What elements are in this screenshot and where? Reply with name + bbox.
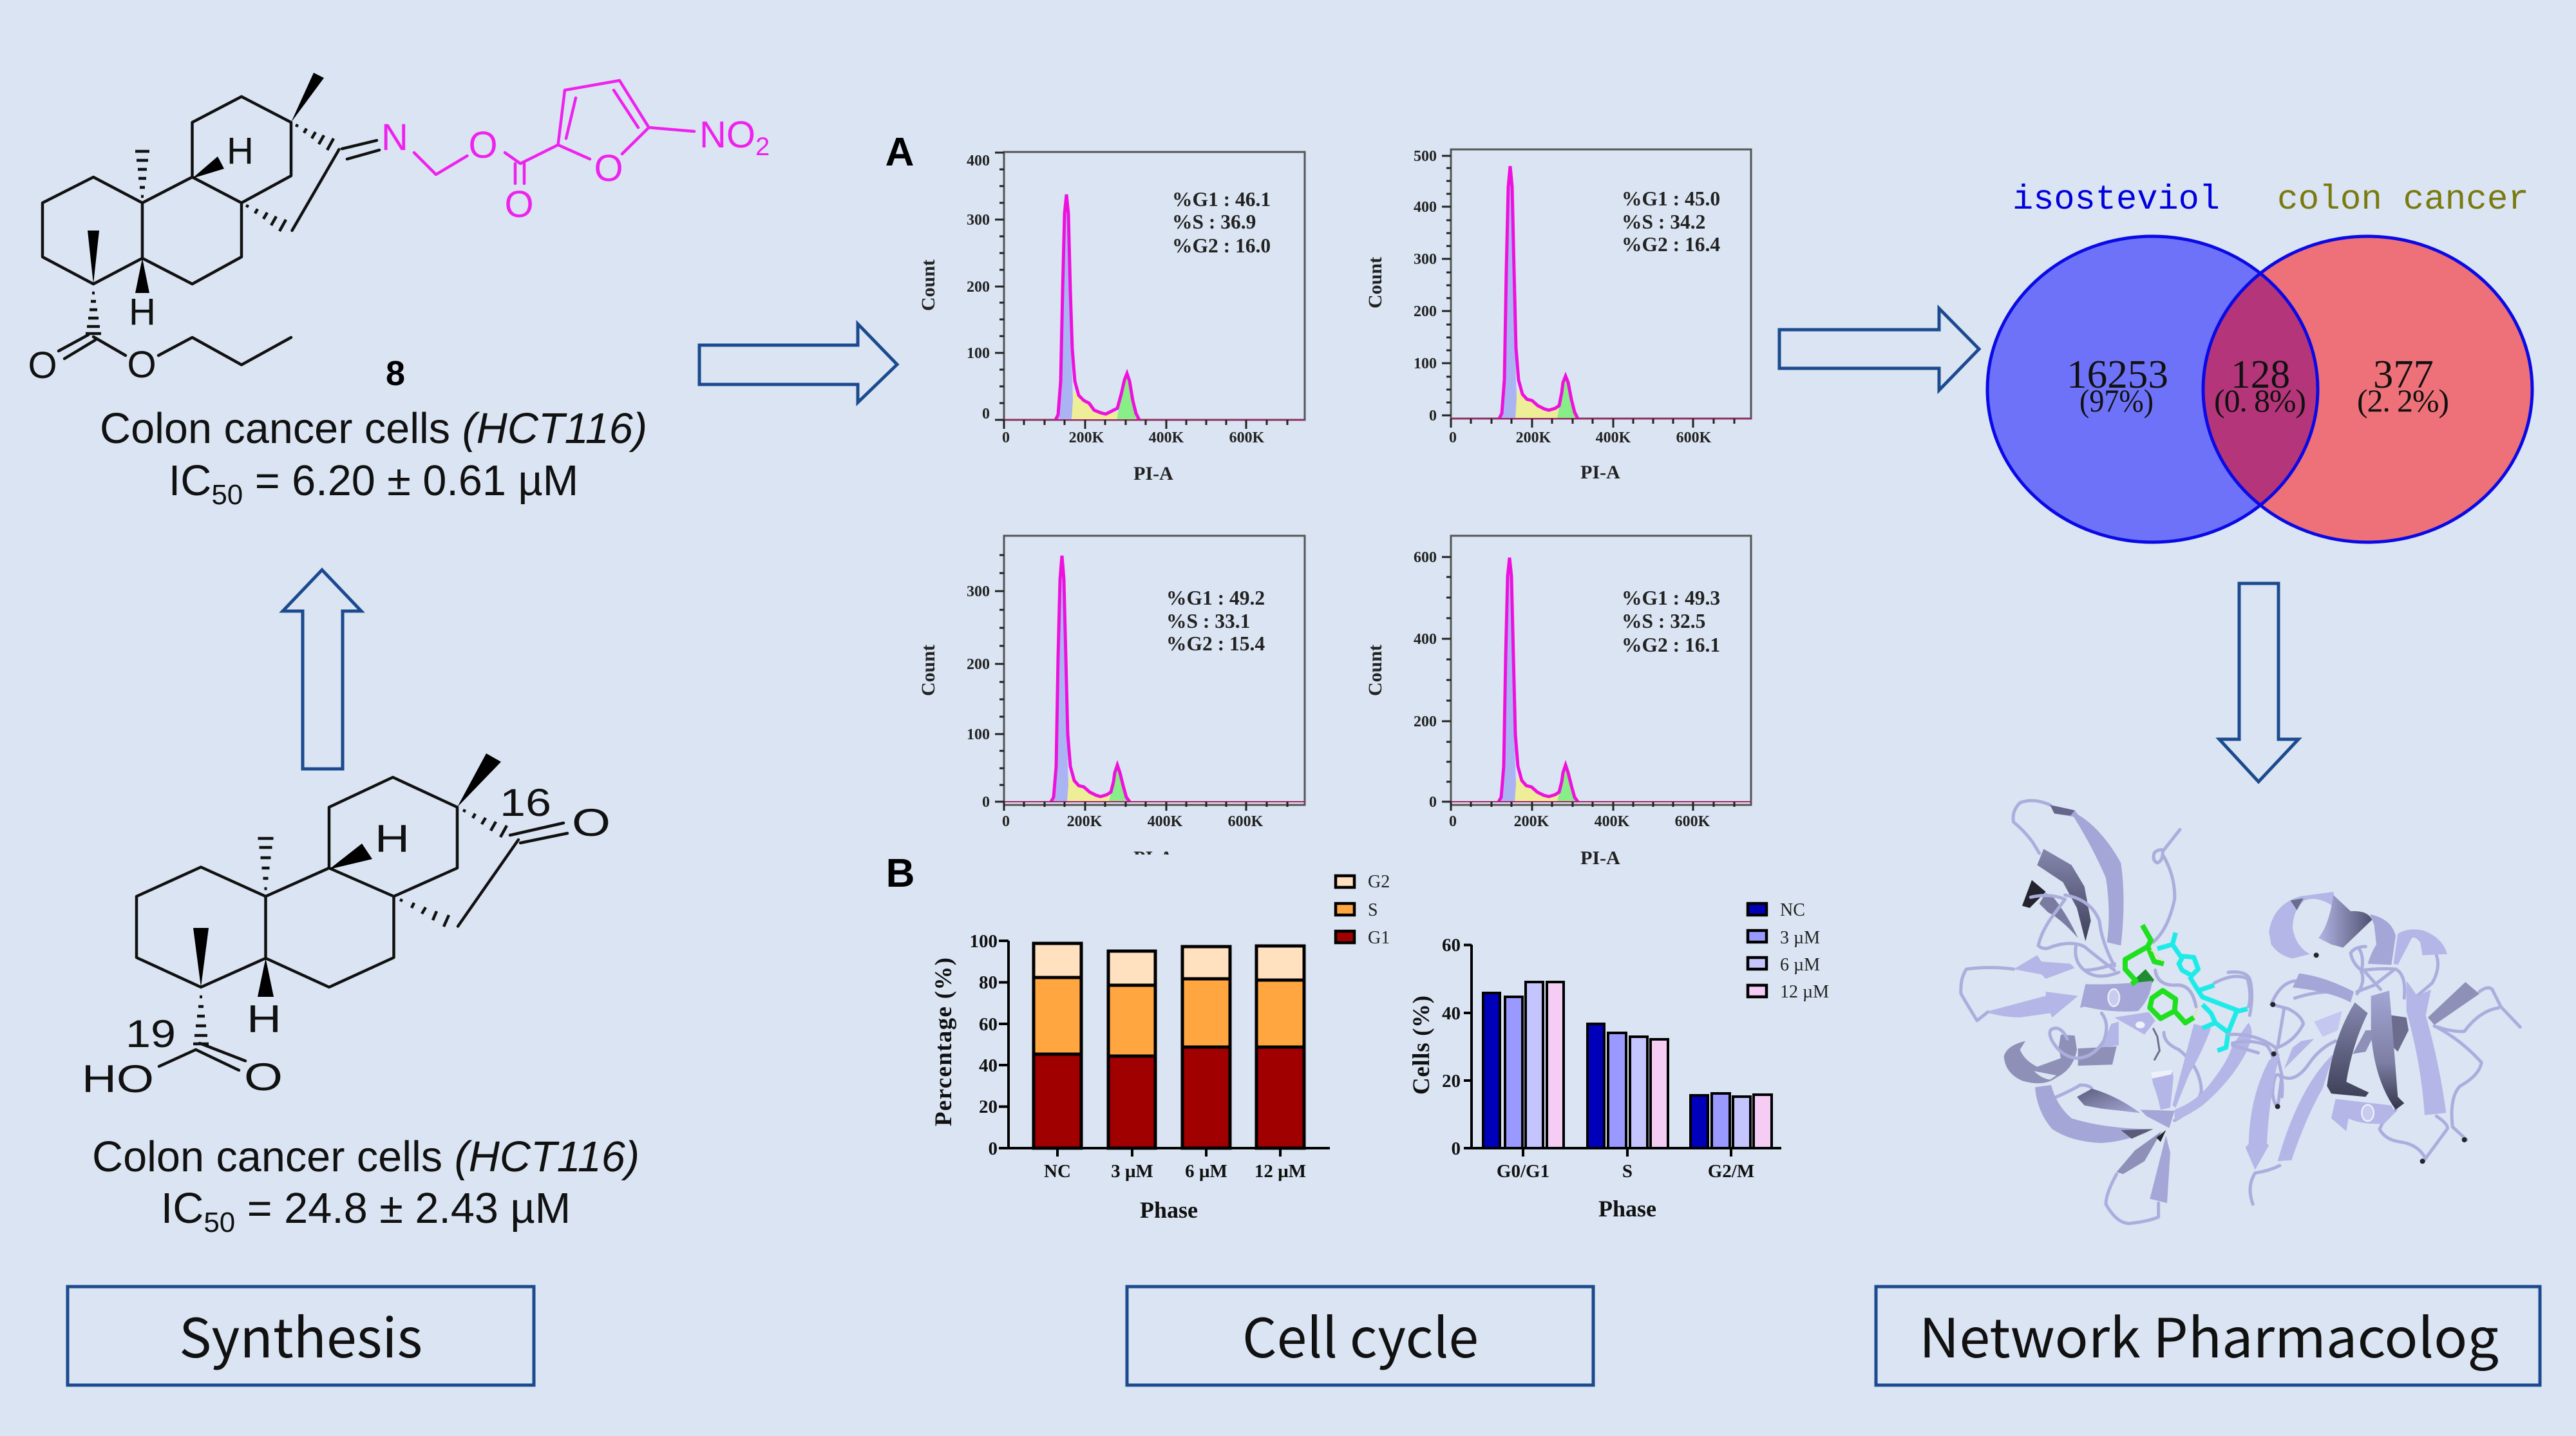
histogram: 6 µM: 600K — [1228, 813, 1264, 830]
activity text: compound 8: = 6.20 ± 0.61 µM — [243, 457, 578, 505]
grouped bar chart: cells per phase: G2/M — [1708, 1161, 1754, 1182]
histogram: 12 µM — [1365, 536, 1751, 869]
histogram: 6 µM: 0 — [982, 794, 990, 811]
compound number: 8 — [386, 354, 405, 393]
histogram: 6 µM: %G2 : 15.4 — [1166, 632, 1265, 655]
panel letter B: B — [886, 851, 914, 896]
bars: G0/G1 — [1483, 982, 1564, 1148]
histogram: NC: 0 — [1002, 430, 1010, 446]
histogram: 6 µM: 200K — [1067, 813, 1103, 830]
label box: cell cycle — [1127, 1287, 1593, 1385]
legend: stacked chart: G2 — [1368, 872, 1390, 892]
histogram: 3 µM: 300 — [1414, 251, 1437, 268]
nitrofuran side chain — [381, 80, 770, 225]
grouped bar chart: cells per phase: 20 — [1442, 1071, 1461, 1091]
label box: synthesis: Synthesis — [179, 1296, 422, 1374]
stacked bar chart: cell phase percentage: Percentage (%) — [931, 958, 957, 1126]
histogram: 12 µM: 400K — [1595, 813, 1630, 830]
nitrofuran side chain: O — [468, 124, 498, 166]
molecule: isosteviol: O — [572, 801, 611, 844]
ligand: green residues — [2125, 925, 2194, 1023]
histogram: NC: PI-A — [1133, 463, 1173, 484]
legend: grouped chart: NC — [1780, 900, 1805, 920]
molecule: isosteviol: 19 — [126, 1012, 176, 1055]
stacked bar chart: cell phase percentage: 40 — [979, 1055, 998, 1076]
histogram: NC — [918, 152, 1305, 484]
histogram: 12 µM: Count — [1365, 645, 1386, 696]
venn set labels — [2012, 180, 2529, 220]
molecule: isosteviol: HO — [82, 1057, 154, 1101]
histogram: 6 µM — [918, 536, 1305, 869]
venn counts: 16253 — [2067, 353, 2168, 397]
bars: G2/M — [1690, 1093, 1772, 1148]
nitrofuran side chain: O — [594, 147, 623, 189]
histogram: 6 µM: 400K — [1148, 813, 1183, 830]
protein: right domain — [2228, 892, 2520, 1204]
stacked bar chart: cell phase percentage — [931, 931, 1330, 1223]
label box: synthesis — [68, 1287, 534, 1385]
molecule: compound 8: O — [28, 345, 57, 386]
venn counts: (0. 8%) — [2214, 383, 2306, 419]
grouped bar chart: cells per phase: Cells (%) — [1408, 996, 1435, 1095]
histogram: 12 µM: 600 — [1414, 549, 1437, 566]
legend: grouped chart: 6 µM — [1780, 955, 1820, 975]
grouped bar chart: cells per phase: G0/G1 — [1497, 1161, 1549, 1182]
histogram: 6 µM: 200 — [967, 656, 990, 673]
histogram: NC: Count — [918, 260, 939, 311]
arrow: up, isosteviol to compound 8 — [283, 570, 361, 769]
panel letter A: A — [886, 130, 914, 175]
histogram: 6 µM: 100 — [967, 726, 990, 743]
histogram: 6 µM: Count — [918, 645, 939, 696]
stacked bar chart: cell phase percentage: 6 µM — [1185, 1161, 1227, 1182]
activity text: isosteviol: Colon cancer cells (HCT116) — [92, 1133, 639, 1181]
grouped bar chart: cells per phase: 0 — [1452, 1138, 1461, 1159]
arrow: synthesis to cell cycle — [699, 324, 897, 402]
grouped bar chart: cells per phase: 60 — [1442, 935, 1461, 956]
stacked bar chart: cell phase percentage: 60 — [979, 1014, 998, 1035]
stacked bar chart: cell phase percentage: Phase — [1140, 1197, 1198, 1223]
venn counts: (2. 2%) — [2357, 383, 2449, 419]
arrow: venn to docking — [2219, 583, 2298, 782]
histogram: 6 µM: PI-A — [1133, 847, 1173, 869]
stacked bar chart: cell phase percentage: 20 — [979, 1097, 998, 1117]
molecule: isosteviol: O — [244, 1055, 283, 1099]
molecule: isosteviol — [82, 753, 611, 1101]
molecule: compound 8 — [28, 73, 770, 386]
protein: upper part of left domain — [1961, 800, 2273, 1083]
histogram: 6 µM: 300 — [967, 583, 990, 600]
molecule: compound 8: O — [127, 344, 156, 386]
bars: 12 µM — [1256, 946, 1304, 1148]
histogram: 3 µM: %G2 : 16.4 — [1622, 233, 1720, 256]
stacked bar chart: cell phase percentage: NC — [1044, 1161, 1071, 1182]
venn counts: 128 — [2231, 353, 2290, 397]
histogram: 12 µM: PI-A — [1580, 847, 1620, 869]
label box: network pharmacology: Network Pharmacolog — [1919, 1296, 2499, 1374]
histogram: NC: 0 — [982, 406, 990, 422]
legend: stacked chart — [1336, 872, 1390, 948]
molecule: isosteviol: 16 — [500, 781, 551, 824]
histogram: 3 µM: PI-A — [1580, 462, 1620, 483]
histogram: NC: %G2 : 16.0 — [1172, 234, 1271, 257]
venn counts: (97%) — [2079, 383, 2154, 419]
histogram: 3 µM: 200K — [1516, 430, 1551, 446]
histogram: 3 µM: 500 — [1414, 148, 1437, 165]
stacked bar chart: cell phase percentage: 3 µM — [1111, 1161, 1153, 1182]
histogram: 3 µM: Count — [1365, 257, 1386, 308]
protein-ligand docking structure — [1961, 800, 2520, 1223]
activity text: compound 8: 50 — [211, 479, 243, 511]
histogram: 12 µM: 200K — [1514, 813, 1549, 830]
stacked bar chart: cell phase percentage: 100 — [970, 931, 998, 952]
nitrofuran side chain: N — [381, 117, 408, 158]
venn counts: 377 — [2373, 353, 2434, 397]
molecule: compound 8: H — [129, 291, 156, 333]
label box: network pharmacology — [1876, 1287, 2540, 1385]
histogram: 3 µM: 0 — [1429, 408, 1437, 424]
histogram: NC: 300 — [967, 212, 990, 229]
histogram: 6 µM: 0 — [1002, 813, 1010, 830]
histogram: 12 µM: 600K — [1675, 813, 1710, 830]
histogram: NC: 100 — [967, 345, 990, 362]
histogram: NC: %S : 36.9 — [1172, 211, 1256, 233]
activity text: compound 8: Colon cancer cells (HCT116) — [100, 405, 647, 453]
histogram: 3 µM: 200 — [1414, 303, 1437, 320]
histogram: 6 µM: %G1 : 49.2 — [1166, 587, 1265, 609]
grouped bar chart: cells per phase: S — [1622, 1161, 1633, 1182]
grouped bar chart: cells per phase: Phase — [1598, 1196, 1656, 1222]
venn counts — [2067, 353, 2449, 419]
grouped bar chart: cells per phase — [1408, 935, 1781, 1222]
histogram: 12 µM: 0 — [1449, 813, 1457, 830]
histogram: NC: 200K — [1069, 430, 1104, 446]
venn diagram — [1987, 180, 2532, 542]
histogram: 3 µM: %G1 : 45.0 — [1622, 187, 1720, 210]
histogram: 12 µM: %S : 32.5 — [1622, 610, 1705, 632]
histogram: 12 µM: 0 — [1429, 794, 1437, 811]
legend: stacked chart: G1 — [1368, 928, 1390, 948]
nitrofuran side chain: O — [504, 184, 534, 225]
stacked bar chart: cell phase percentage: 80 — [979, 972, 998, 993]
molecule: isosteviol: H — [375, 817, 410, 860]
histogram: NC: 400 — [967, 153, 990, 169]
molecule: isosteviol: H — [247, 997, 281, 1041]
activity text: isosteviol: 50 — [204, 1207, 235, 1238]
histogram: NC: %G1 : 46.1 — [1172, 188, 1271, 211]
stacked bar chart: cell phase percentage: 0 — [988, 1138, 998, 1159]
molecule: compound 8: H — [227, 130, 254, 172]
histogram: 3 µM: 400 — [1414, 199, 1437, 216]
histogram: 3 µM: %S : 34.2 — [1622, 211, 1705, 233]
histogram: 3 µM: 600K — [1676, 430, 1712, 446]
legend: stacked chart: S — [1368, 900, 1378, 920]
histogram: NC: 400K — [1149, 430, 1184, 446]
venn set labels: isosteviol — [2012, 180, 2220, 220]
histogram: 3 µM: 100 — [1414, 355, 1437, 372]
activity text: isosteviol: = 24.8 ± 2.43 µM — [235, 1185, 571, 1233]
histogram: 3 µM: 400K — [1596, 430, 1631, 446]
histogram: 12 µM: %G2 : 16.1 — [1622, 634, 1720, 656]
arrow: cell cycle to network pharmacology — [1779, 308, 1979, 390]
histogram: 12 µM: 400 — [1414, 631, 1437, 648]
histogram: NC: 600K — [1229, 430, 1265, 446]
label box: cell cycle: Cell cycle — [1242, 1296, 1479, 1374]
grouped bar chart: cells per phase: 40 — [1442, 1003, 1461, 1024]
stacked bar chart: cell phase percentage: 12 µM — [1255, 1161, 1306, 1182]
activity text: isosteviol: IC — [161, 1185, 571, 1238]
nitrofuran side chain: 2 — [755, 133, 770, 161]
histogram: 3 µM — [1365, 148, 1751, 483]
bars: 6 µM — [1182, 947, 1230, 1148]
nitrofuran side chain: NO — [699, 114, 755, 156]
legend: grouped chart: 12 µM — [1780, 982, 1829, 1002]
venn set labels: colon cancer — [2277, 180, 2529, 220]
legend: grouped chart: 3 µM — [1780, 928, 1820, 948]
ligand: cyan compound — [2157, 932, 2248, 1051]
bars: 3 µM — [1108, 951, 1155, 1148]
histogram: NC: 200 — [967, 279, 990, 296]
activity text: compound 8: IC — [169, 457, 578, 511]
histogram: 12 µM: %G1 : 49.3 — [1622, 587, 1720, 609]
histogram: 3 µM: 0 — [1449, 430, 1457, 446]
bars: S — [1587, 1024, 1668, 1148]
bars: NC — [1034, 943, 1081, 1148]
histogram: 6 µM: %S : 33.1 — [1166, 610, 1250, 632]
legend: grouped chart — [1748, 900, 1829, 1002]
protein: lower part of left domain — [2035, 1023, 2251, 1223]
histogram: 12 µM: 200 — [1414, 713, 1437, 730]
